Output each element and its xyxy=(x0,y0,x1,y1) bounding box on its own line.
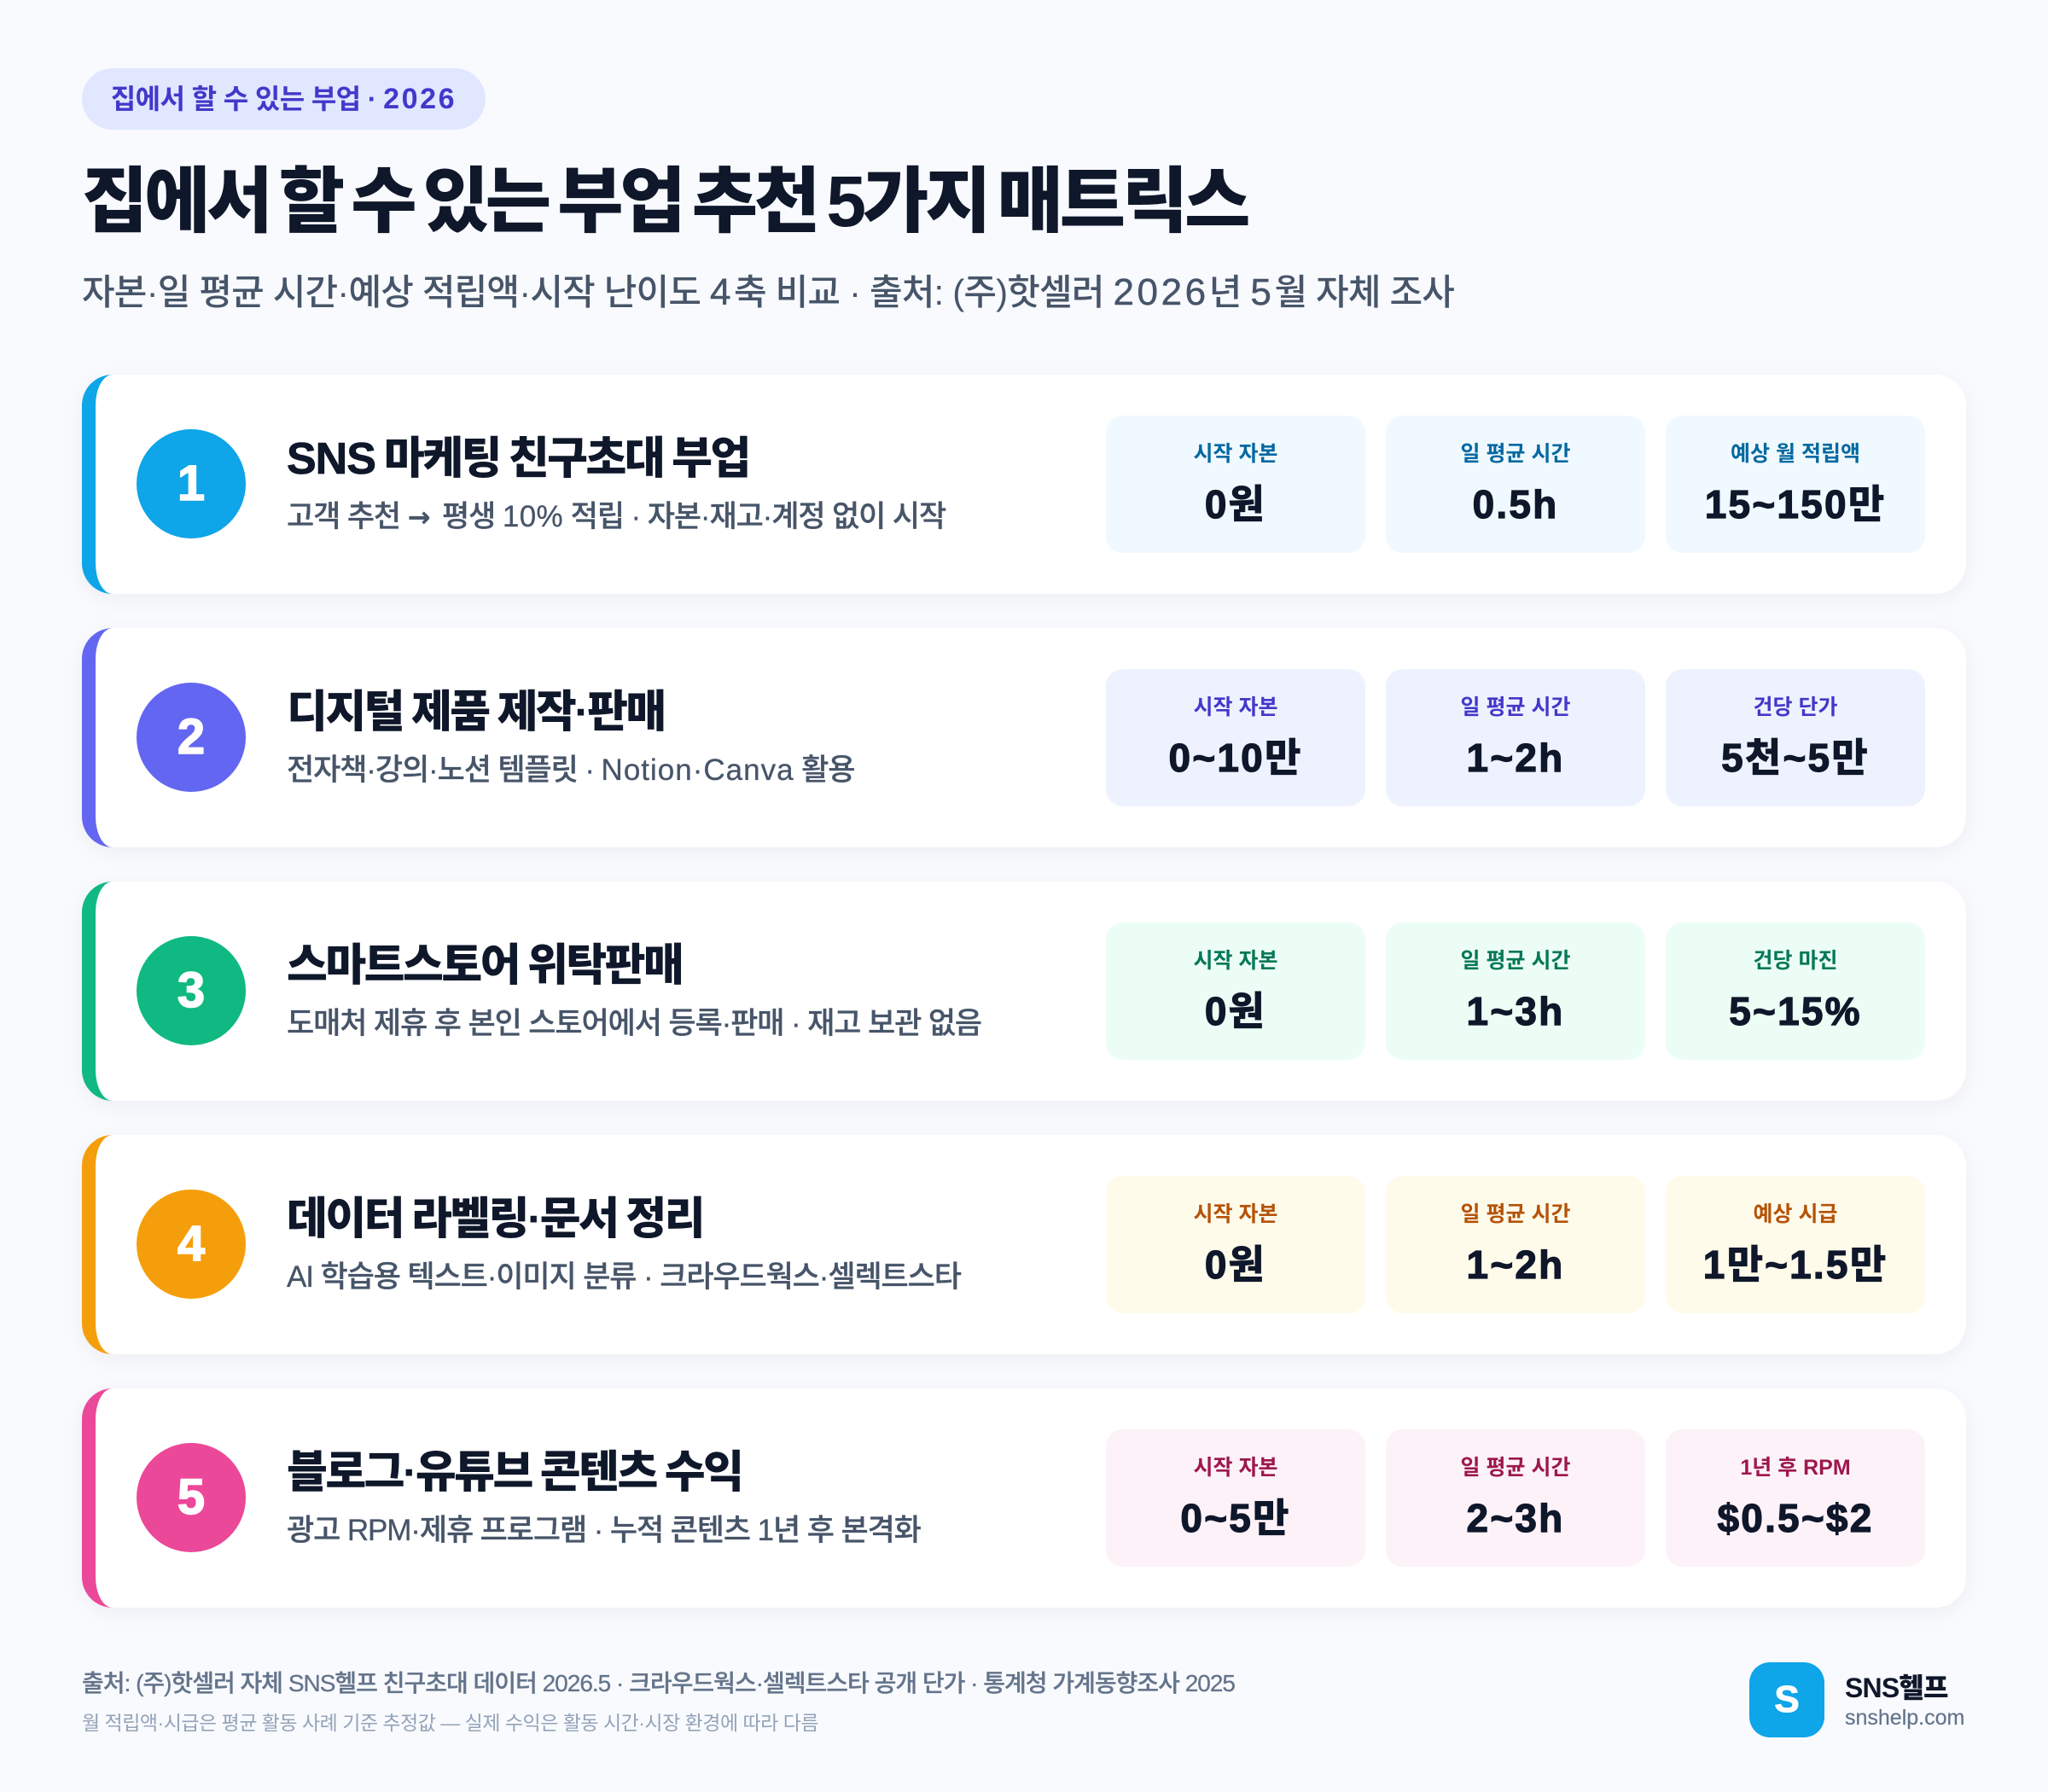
card title 4: 데이터 라벨링·문서 정리 xyxy=(287,1195,703,1244)
number badge 5 xyxy=(137,1443,246,1552)
metric: monthly points: 15~150만 xyxy=(1705,482,1886,527)
metric: RPM: $0.5~$2 xyxy=(1718,1496,1873,1540)
number badge 2 xyxy=(137,683,246,792)
metric: hourly rate: 1만~1.5만 xyxy=(1703,1242,1888,1287)
metric: RPM xyxy=(1666,1429,1925,1567)
metric: start capital: 시작 자본 xyxy=(1194,1202,1277,1226)
card title 3: 스마트스토어 위탁판매 xyxy=(287,941,682,991)
panel: card 5 blog and YouTube xyxy=(82,1388,1966,1608)
card title 2: 디지털 제품 제작·판매 xyxy=(287,688,665,737)
number badge 3: 3 xyxy=(177,963,205,1018)
metric: monthly points xyxy=(1666,416,1925,553)
number badge 4: 4 xyxy=(177,1216,205,1271)
metric: margin: 건당 마진 xyxy=(1754,949,1837,973)
metric: daily hours: 일 평균 시간 xyxy=(1461,949,1570,973)
card description 1: 고객 추천 → 평생 10% 적립 · 자본·재고·계정 없이 시작 xyxy=(287,500,945,533)
metric: start capital xyxy=(1106,416,1365,553)
metric: start capital: 시작 자본 xyxy=(1194,695,1277,719)
number badge 2: 2 xyxy=(177,709,205,765)
metric: start capital: 시작 자본 xyxy=(1194,1456,1277,1480)
number badge 1 xyxy=(137,429,246,538)
footer disclaimer: 월 적립액·시급은 평균 활동 사례 기준 추정값 — 실제 수익은 활동 시간·시장 환경에 따라 다름 xyxy=(82,1712,818,1734)
metric: daily hours: 일 평균 시간 xyxy=(1461,1456,1570,1480)
metric: daily hours xyxy=(1386,922,1645,1060)
metric: start capital: 시작 자본 xyxy=(1194,442,1277,466)
metric: unit price: 5천~5만 xyxy=(1721,736,1870,780)
logo url: snshelp.com xyxy=(1845,1706,1964,1730)
metric: hourly rate xyxy=(1666,1176,1925,1313)
metric: start capital xyxy=(1106,1429,1365,1567)
metric: hourly rate: 예상 시급 xyxy=(1754,1202,1837,1226)
metric: margin xyxy=(1666,922,1925,1060)
metric: daily hours: 일 평균 시간 xyxy=(1461,442,1570,466)
metric: daily hours: 일 평균 시간 xyxy=(1461,695,1570,719)
metric: daily hours: 1~2h xyxy=(1467,736,1564,780)
badge xyxy=(82,68,486,130)
title: 집에서 할 수 있는 부업 추천 5가지 매트릭스 xyxy=(82,161,1247,241)
badge: 집에서 할 수 있는 부업 · 2026 xyxy=(111,83,457,115)
metric: daily hours: 2~3h xyxy=(1467,1496,1564,1540)
subtitle: 자본·일 평균 시간·예상 적립액·시작 난이도 4축 비교 · 출처: (주)핫셀러 2026년 5월 자체 조사 xyxy=(82,271,1454,313)
card description 4: AI 학습용 텍스트·이미지 분류 · 크라우드웍스·셀렉트스타 xyxy=(287,1260,961,1294)
metric: daily hours xyxy=(1386,1429,1645,1567)
metric: daily hours: 일 평균 시간 xyxy=(1461,1202,1570,1226)
metric: start capital: 시작 자본 xyxy=(1194,949,1277,973)
logo icon: S xyxy=(1774,1679,1800,1720)
metric: RPM: 1년 후 RPM xyxy=(1740,1456,1851,1480)
metric: daily hours: 1~2h xyxy=(1467,1242,1564,1287)
logo name: SNS헬프 xyxy=(1845,1673,1948,1703)
metric: daily hours: 1~3h xyxy=(1467,989,1564,1033)
card description 2: 전자책·강의·노션 템플릿 · Notion·Canva 활용 xyxy=(287,753,854,787)
number badge 1: 1 xyxy=(177,456,205,511)
card description 3: 도매처 제휴 후 본인 스토어에서 등록·판매 · 재고 보관 없음 xyxy=(287,1007,981,1040)
number badge 4 xyxy=(137,1190,246,1299)
number badge 3 xyxy=(137,936,246,1045)
metric: unit price: 건당 단가 xyxy=(1754,695,1837,719)
metric: daily hours xyxy=(1386,1176,1645,1313)
card description 5: 광고 RPM·제휴 프로그램 · 누적 콘텐츠 1년 후 본격화 xyxy=(287,1514,921,1547)
metric: start capital xyxy=(1106,1176,1365,1313)
metric: start capital: 0~10만 xyxy=(1169,736,1302,780)
metric: start capital: 0원 xyxy=(1205,989,1266,1033)
metric: daily hours: 0.5h xyxy=(1473,482,1558,527)
card title 5: 블로그·유튜브 콘텐츠 수익 xyxy=(287,1448,742,1498)
card title 1: SNS 마케팅 친구초대 부업 xyxy=(287,434,749,484)
metric: monthly points: 예상 월 적립액 xyxy=(1731,442,1860,466)
logo icon xyxy=(1749,1662,1824,1737)
metric: start capital xyxy=(1106,669,1365,806)
metric: start capital: 0원 xyxy=(1205,1242,1266,1287)
metric: margin: 5~15% xyxy=(1729,989,1862,1033)
panel: card 3 smart store xyxy=(82,881,1966,1101)
panel: card 2 digital products xyxy=(82,628,1966,847)
metric: daily hours xyxy=(1386,416,1645,553)
metric: unit price xyxy=(1666,669,1925,806)
metric: start capital xyxy=(1106,922,1365,1060)
metric: start capital: 0원 xyxy=(1205,482,1266,527)
panel: card 4 data labeling xyxy=(82,1135,1966,1354)
metric: daily hours xyxy=(1386,669,1645,806)
footer source note: 출처: (주)핫셀러 자체 SNS헬프 친구초대 데이터 2026.5 · 크라우드웍스·셀렉트스타 공개 단가 · 통계청 가계동향조사 2025 xyxy=(82,1670,1235,1696)
panel: card 1 SNS marketing xyxy=(82,375,1966,594)
metric: start capital: 0~5만 xyxy=(1180,1496,1291,1540)
number badge 5: 5 xyxy=(177,1469,205,1525)
